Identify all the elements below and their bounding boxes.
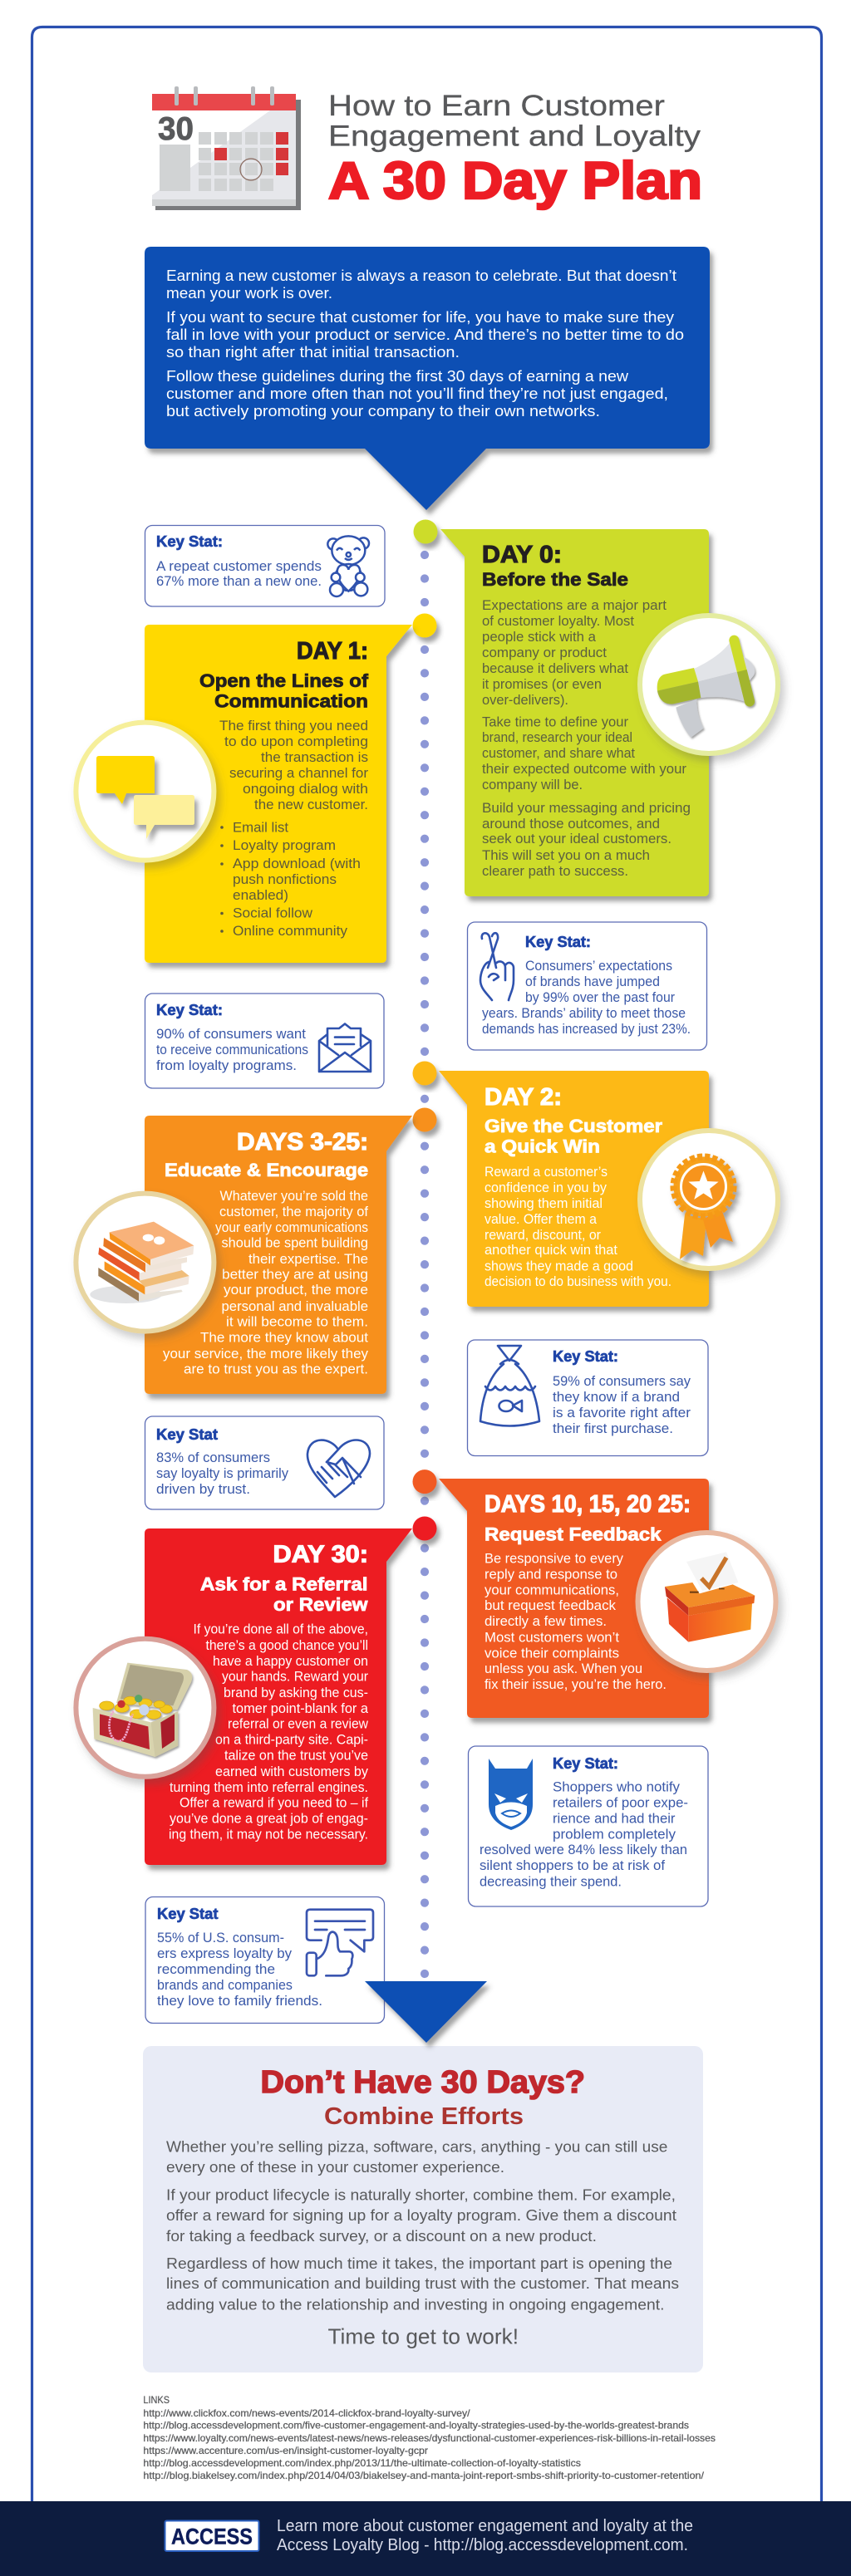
body text: day 30: Offer a reward if you need to – if [180,1796,368,1811]
key stat: favorite brand: Key Stat: [553,1348,618,1365]
body text: day 0: This will set you on a much [482,848,650,863]
icon: heart handshake [307,1440,370,1497]
body text: days 10, 15, 20, 25: unless you ask. When you [485,1661,642,1676]
body text: day 30 [169,1622,369,1842]
body text: day 0: because it delivers what [482,661,628,676]
body text: don't have 30 days: every one of these in your customer experience. [166,2159,504,2176]
key stat: trust: say loyalty is primarily [156,1466,289,1481]
icon: ballot box in circle [638,1533,776,1671]
icon: calendar [152,86,301,210]
key stat: recommendations: Key Stat [157,1906,219,1922]
bullet list: day 1: Online community [233,924,348,939]
body text: day 2: showing them initial [485,1196,603,1211]
key stat: trust: driven by trust. [156,1482,250,1497]
body text: day 0: Take time to define your [482,714,628,729]
body text: day 30: your hands. Reward your [222,1670,368,1685]
body text: day 1: the transaction is [261,750,368,765]
key stat: repeat customer: Key Stat: [156,533,223,550]
key stat: recommendations: brands and companies [157,1978,293,1993]
heading: days 10, 15, 20, 25 [485,1491,691,1545]
body text: day 1: securing a channel for [229,766,369,781]
logo: access: ACCESS [171,2524,253,2549]
heading: day 2: Give the Customer [485,1116,662,1136]
body text: day 1: The first thing you need [219,719,368,734]
body text: days 3-25: their expertise. The [248,1252,368,1267]
body text: day 0: around those outcomes, and [482,817,660,832]
title [328,90,702,210]
key stat: favorite brand: they know if a brand [553,1390,680,1405]
bullet list: day 1: push nonfictions [233,872,337,887]
heading: don't have 30 days: Combine Efforts [324,2103,524,2130]
body text: day 0 [482,598,691,879]
panel: intro callout: customer and more often than not you’ll find they’re not just engaged, [166,385,668,402]
bullet list: day 1 [220,821,361,939]
body text: day 30: tomer point-blank for a [233,1701,369,1716]
heading: day 1: DAY 1: [297,638,368,665]
links list: http://blog.accessdevelopment.com/index.php/2013/11/the-ultimate-collection-of-loyalty-statistics [143,2457,581,2469]
key stat: favorite brand: is a favorite right after [553,1406,691,1420]
panel: intro callout: so than right after that initial transaction. [166,344,460,361]
body text: day 30: there’s a good chance you’ll [206,1638,368,1653]
body text: day 30: ing them, it may not be necessary. [169,1828,368,1842]
key stat: batman: retailers of poor expe- [553,1796,688,1811]
bullet list: day 1: Email list [233,821,288,836]
heading: day 0: Before the Sale [482,569,628,590]
panel: intro callout: mean your work is over. [166,285,332,302]
body text: day 0: brand, research your ideal [482,730,632,745]
icon: envelope [319,1023,371,1072]
key stat: trust: 83% of consumers [156,1450,270,1465]
body text: days 10, 15, 20, 25: voice their complaints [485,1646,619,1661]
body text: days 3-25: it will become to them. [226,1314,368,1329]
panel: intro callout: but actively promoting your company to their own networks. [166,403,600,420]
body text: day 0: customer, and share what [482,746,635,761]
body text: day 2: shows they made a good [485,1259,633,1274]
body text: day 30: turning them into referral engines. [170,1780,368,1795]
marker: day 30 [412,1517,437,1540]
key stat: batman: decreasing their spend. [480,1874,622,1889]
bullet list: day 1: Loyalty program [233,838,336,853]
title: How to Earn Customer [328,90,665,122]
key stat: recommendations: ers express loyalty by [157,1946,293,1961]
heading: day 2 [485,1084,662,1156]
icon: stack of books in circle [76,1194,214,1332]
footer text: Access Loyalty Blog - http://blog.accessdevelopment.com. [277,2536,688,2554]
body text: day 0: company will be. [482,778,583,792]
body text: day 2: reward, discount, or [485,1228,601,1243]
key stat: recommendations: recommending the [157,1962,275,1977]
body text: day 0: Expectations are a major part [482,598,667,613]
body text: days 3-25: are to trust you as the expert. [184,1362,368,1377]
body text: day 30: you’ve done a great job of engag- [170,1812,368,1827]
icon: chat bubbles in circle [76,723,214,861]
body text: days 10, 15, 20, 25: directly a few times. [485,1614,607,1629]
key stat: batman: rience and had their [553,1812,676,1827]
body text: don't have 30 days: for taking a feedback survey, or a discount on a new product. [166,2228,597,2245]
heading: day 30: DAY 30: [273,1542,368,1568]
body text: day 30: have a happy customer on [213,1654,368,1669]
key stat: crossed fingers: demands has increased by just 23%. [482,1022,691,1037]
body text: day 0: company or product [482,645,607,660]
panel: day 1 [76,613,437,963]
body text: day 1 [219,719,369,812]
heading: don't have 30 days [261,2065,585,2130]
panel: intro callout [145,247,710,510]
heading: day 30: or Review [273,1594,368,1615]
key stat: crossed fingers: of brands have jumped [525,974,660,989]
heading: day 30: Ask for a Referral [200,1573,367,1594]
body text: day 0: people stick with a [482,630,597,645]
links list: https://www.loyalty.com/news-events/latest-news/news-releases/dysfunctional-customer-experiences-risk-billions-in-retail-losses [143,2432,716,2444]
heading: day 2: DAY 2: [485,1084,562,1111]
key stat: crossed fingers [467,922,706,1050]
heading: days 3-25: DAYS 3-25: [237,1129,368,1156]
body text: day 30: brand by asking the cus- [224,1685,368,1700]
key stat: recommendations [145,1897,384,2024]
marker: days 10, 15, 20, 25 [412,1470,437,1494]
heading: day 30 [200,1542,368,1615]
key stat: repeat customer: A repeat customer spends [156,559,322,574]
heading: don't have 30 days: Don’t Have 30 Days? [261,2065,585,2100]
icon: crossed fingers [480,933,514,1000]
body text: days 3-25: personal and invaluable [221,1299,368,1314]
key stat: favorite brand [467,1340,708,1455]
body text: days 3-25: your early communications [215,1220,368,1235]
key stat: repeat customer: 67% more than a new one. [156,574,322,589]
body text: don't have 30 days [166,2138,679,2313]
footer text: Learn more about customer engagement and loyalty at the [277,2517,693,2535]
body text: day 30: If you’re done all of the above, [193,1622,368,1636]
key stat: batman [469,1746,708,1906]
marker: day 0 [414,520,437,543]
heading: day 1 [199,638,369,711]
body text: days 3-25: Whatever you’re sold the [219,1189,368,1204]
panel: day 0 [414,520,778,896]
icon: teddy bear [327,536,369,596]
body text: days 3-25: should be spent building [221,1236,368,1251]
key stat: batman: Key Stat: [553,1755,618,1772]
body text: don't have 30 days: Whether you’re selling pizza, software, cars, anything - you can still use [166,2138,667,2155]
heading: day 1: Open the Lines of [199,670,369,691]
heading: day 1: Communication [214,691,368,711]
key stat: favorite brand: 59% of consumers say [553,1374,691,1389]
key stat: trust [145,1416,384,1509]
key stat: repeat customer [145,525,385,606]
icon: treasure chest in circle [76,1639,214,1777]
body text: day 1: ongoing dialog with [243,782,368,797]
panel: day 2 [412,1062,778,1307]
links list: https://www.accenture.com/us-en/insight-customer-loyalty-gcpr [143,2445,428,2456]
key stat: communications [145,994,384,1088]
body text: day 0: clearer path to success. [482,864,628,879]
heading: days 10, 15, 20, 25: Request Feedback [485,1524,662,1545]
body text: day 2: another quick win that [485,1243,617,1258]
key stat: communications: Key Stat: [156,1002,223,1018]
body text: day 2 [485,1165,671,1289]
heading: days 3-25 [165,1129,368,1180]
body text: days 10, 15, 20, 25: your communications, [485,1583,619,1598]
title: A 30 Day Plan [328,152,702,210]
body text: day 0: their expected outcome with your [482,762,686,777]
key stat: crossed fingers: years. Brands’ ability to meet those [482,1006,686,1021]
body text: days 3-25: your product, the more [224,1283,368,1298]
call to action: Time to get to work! [327,2324,519,2349]
icon: thumbs up speech bubble [307,1910,373,1975]
links list [143,2394,716,2481]
header: calendar and title [152,86,702,210]
body text: don't have 30 days: offer a reward for signing up for a loyalty program. Give them a discount [166,2207,676,2224]
key stat: communications: 90% of consumers want [156,1027,306,1042]
footer [0,2501,851,2576]
links list: http://www.clickfox.com/news-events/2014-clickfox-brand-loyalty-survey/ [143,2407,470,2419]
key stat: crossed fingers: Consumers’ expectations [525,959,672,974]
heading: days 3-25: Educate & Encourage [165,1160,368,1180]
icon: calendar: 30 [158,111,194,147]
key stat: batman: problem completely [553,1828,676,1842]
key stat: batman: silent shoppers to be at risk of [480,1858,665,1873]
body text: day 0: over-delivers). [482,693,568,708]
panel: intro callout: Follow these guidelines during the first 30 days of earning a new [166,368,629,385]
body text: days 3-25: The more they know about [200,1331,368,1346]
body text: day 2: confidence in you by [485,1180,608,1195]
panel: day 30 [76,1517,437,1865]
heading: days 10, 15, 20, 25: DAYS 10, 15, 20 25: [485,1491,691,1518]
body text: days 10, 15, 20, 25: fix their issue, you’re the hero. [485,1677,667,1692]
key stat: favorite brand: their first purchase. [553,1421,673,1436]
key stat: recommendations: 55% of U.S. consum- [157,1931,284,1945]
body text: days 3-25 [163,1189,369,1377]
key stat: crossed fingers: by 99% over the past four [525,990,675,1005]
body text: day 0: seek out your ideal customers. [482,832,671,846]
body text: day 2: Reward a customer’s [485,1165,608,1180]
body text: don't have 30 days: Regardless of how much time it takes, the important part is opening the [166,2255,672,2272]
body text: day 30: talize on the trust you’ve [224,1749,368,1764]
heading: day 0: DAY 0: [482,542,562,568]
panel: intro callout: Earning a new customer is always a reason to celebrate. But that doesn’t [166,267,676,284]
body text: day 0: of customer loyalty. Most [482,614,634,629]
body text: days 3-25: customer, the majority of [219,1205,368,1219]
body text: day 2: value. Offer them a [485,1212,598,1227]
footer text [277,2517,693,2554]
key stat: communications: from loyalty programs. [156,1058,297,1073]
panel: intro callout: fall in love with your product or service. And there’s no better time to do [166,326,684,343]
body text: day 30: referral or even a review [228,1716,368,1731]
panel: days 10, 15, 20, 25 [412,1470,776,1718]
marker: day 1 [412,613,437,638]
body text: day 1: to do upon completing [224,734,368,749]
body text: day 1: the new customer. [254,797,368,812]
body text: days 3-25: better they are at using [222,1268,368,1283]
icon: award ribbon in circle [640,1131,778,1268]
heading: day 2: a Quick Win [485,1136,600,1156]
body text: day 0: Build your messaging and pricing [482,801,691,816]
panel: intro callout: If you want to secure that customer for life, you have to make sure they [166,309,674,326]
title: Engagement and Loyalty [328,120,701,153]
marker: day 2 [412,1062,437,1085]
arrow: down triangle [365,1981,487,2043]
icon: fish in a bag [480,1346,539,1425]
key stat: recommendations: they love to family friends. [157,1994,322,2009]
bullet list: day 1: Social follow [233,905,312,920]
body text: days 10, 15, 20, 25: but request feedback [485,1598,617,1613]
key stat: batman: resolved were 84% less likely than [480,1842,687,1857]
body text: don't have 30 days: If your product lifecycle is naturally shorter, combine them. For example, [166,2187,676,2204]
links list: http://blog.accessdevelopment.com/five-customer-engagement-and-loyalty-strategies-used-by-the-worlds-greatest-brands [143,2420,689,2431]
links list: LINKS [143,2394,170,2406]
body text: day 2: decision to do business with you. [485,1274,671,1289]
panel: don't have 30 days [143,2046,703,2372]
timeline dots [421,551,429,1978]
body text: days 10, 15, 20, 25: Be responsive to every [485,1552,624,1567]
body text: days 3-25: your service, the more likely they [163,1347,369,1362]
body text: days 10, 15, 20, 25: Most customers won’t [485,1630,619,1645]
bullet list: day 1: App download (with [233,856,361,871]
body text: don't have 30 days: adding value to the relationship and investing in ongoing engagement. [166,2297,665,2313]
icon: bat mask [489,1759,533,1830]
marker: days 3-25 [412,1108,437,1131]
icon: megaphone in circle [640,616,778,753]
body text: don't have 30 days: lines of communication and building trust with the customer. That means [166,2275,679,2292]
panel: days 3-25 [76,1108,437,1394]
bullet list: day 1: enabled) [233,888,288,903]
body text: day 30: earned with customers by [215,1764,369,1779]
body text: days 10, 15, 20, 25: reply and response to [485,1567,617,1582]
key stat: batman: Shoppers who notify [553,1779,681,1794]
key stat: crossed fingers: Key Stat: [525,934,591,950]
key stat: communications: to receive communications [156,1043,308,1057]
body text: days 10, 15, 20, 25 [485,1552,667,1692]
body text: day 0: it promises (or even [482,677,602,692]
key stat: trust: Key Stat [156,1426,218,1443]
links list: http://blog.biakelsey.com/index.php/2014/04/03/biakelsey-and-manta-joint-report-smbs-shift-priority-to-customer-retention/ [143,2470,705,2481]
heading: day 0 [482,542,628,590]
body text: day 30: on a third-party site. Capi- [215,1733,368,1748]
